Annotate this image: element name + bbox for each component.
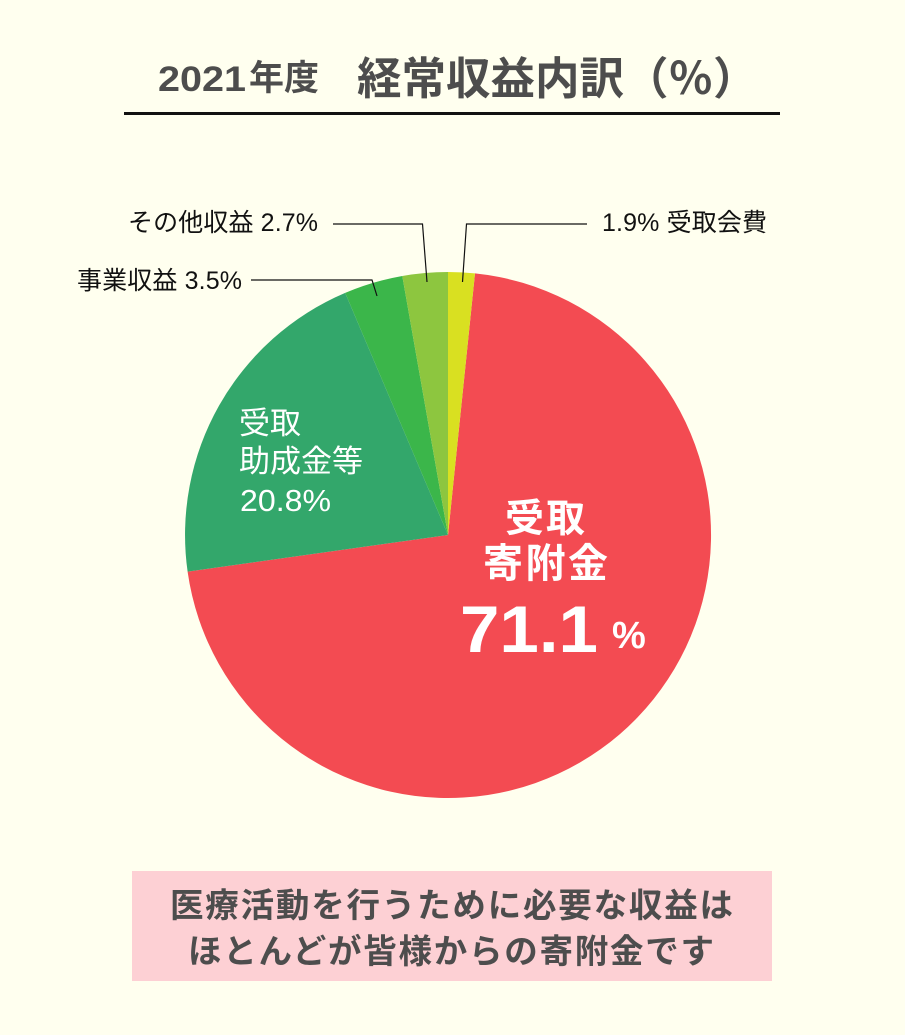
label: donations: % bbox=[612, 615, 646, 657]
label: grants: 助成金等 bbox=[239, 444, 363, 479]
leader: membership fees bbox=[462, 224, 587, 282]
label: donations: 寄附金 bbox=[483, 542, 608, 586]
label: grants: 受取 bbox=[239, 406, 301, 441]
label: grants bbox=[239, 406, 363, 518]
slice: other income 2.7% bbox=[402, 272, 448, 535]
callout bbox=[132, 871, 772, 981]
title: 年度 bbox=[249, 59, 319, 98]
title bbox=[158, 55, 758, 104]
label: donations: 受取 bbox=[505, 498, 585, 541]
pie chart bbox=[185, 272, 711, 798]
callout: 医療活動を行うために必要な収益は bbox=[170, 888, 733, 925]
label: business income: 事業収益 3.5% bbox=[77, 267, 242, 295]
slice: business income 3.5% bbox=[345, 276, 448, 535]
label: grants: 20.8% bbox=[240, 483, 331, 518]
label: donations: 71.1 bbox=[460, 592, 598, 666]
title: 2021 bbox=[158, 60, 246, 99]
title: 経常収益内訳（％） bbox=[357, 55, 758, 104]
callout: ほとんどが皆様からの寄附金です bbox=[188, 933, 714, 971]
label: membership fees: 1.9% 受取会費 bbox=[602, 209, 767, 237]
title underline bbox=[124, 112, 780, 115]
leader: other income bbox=[333, 224, 427, 282]
leader: business income bbox=[251, 280, 377, 296]
slice: grants 20.8% bbox=[185, 293, 448, 572]
label: other income: その他収益 2.7% bbox=[128, 209, 318, 237]
slice: donations 71.1% bbox=[188, 273, 711, 798]
slice: membership fees 1.9% bbox=[448, 272, 475, 535]
label: donations bbox=[460, 498, 646, 666]
